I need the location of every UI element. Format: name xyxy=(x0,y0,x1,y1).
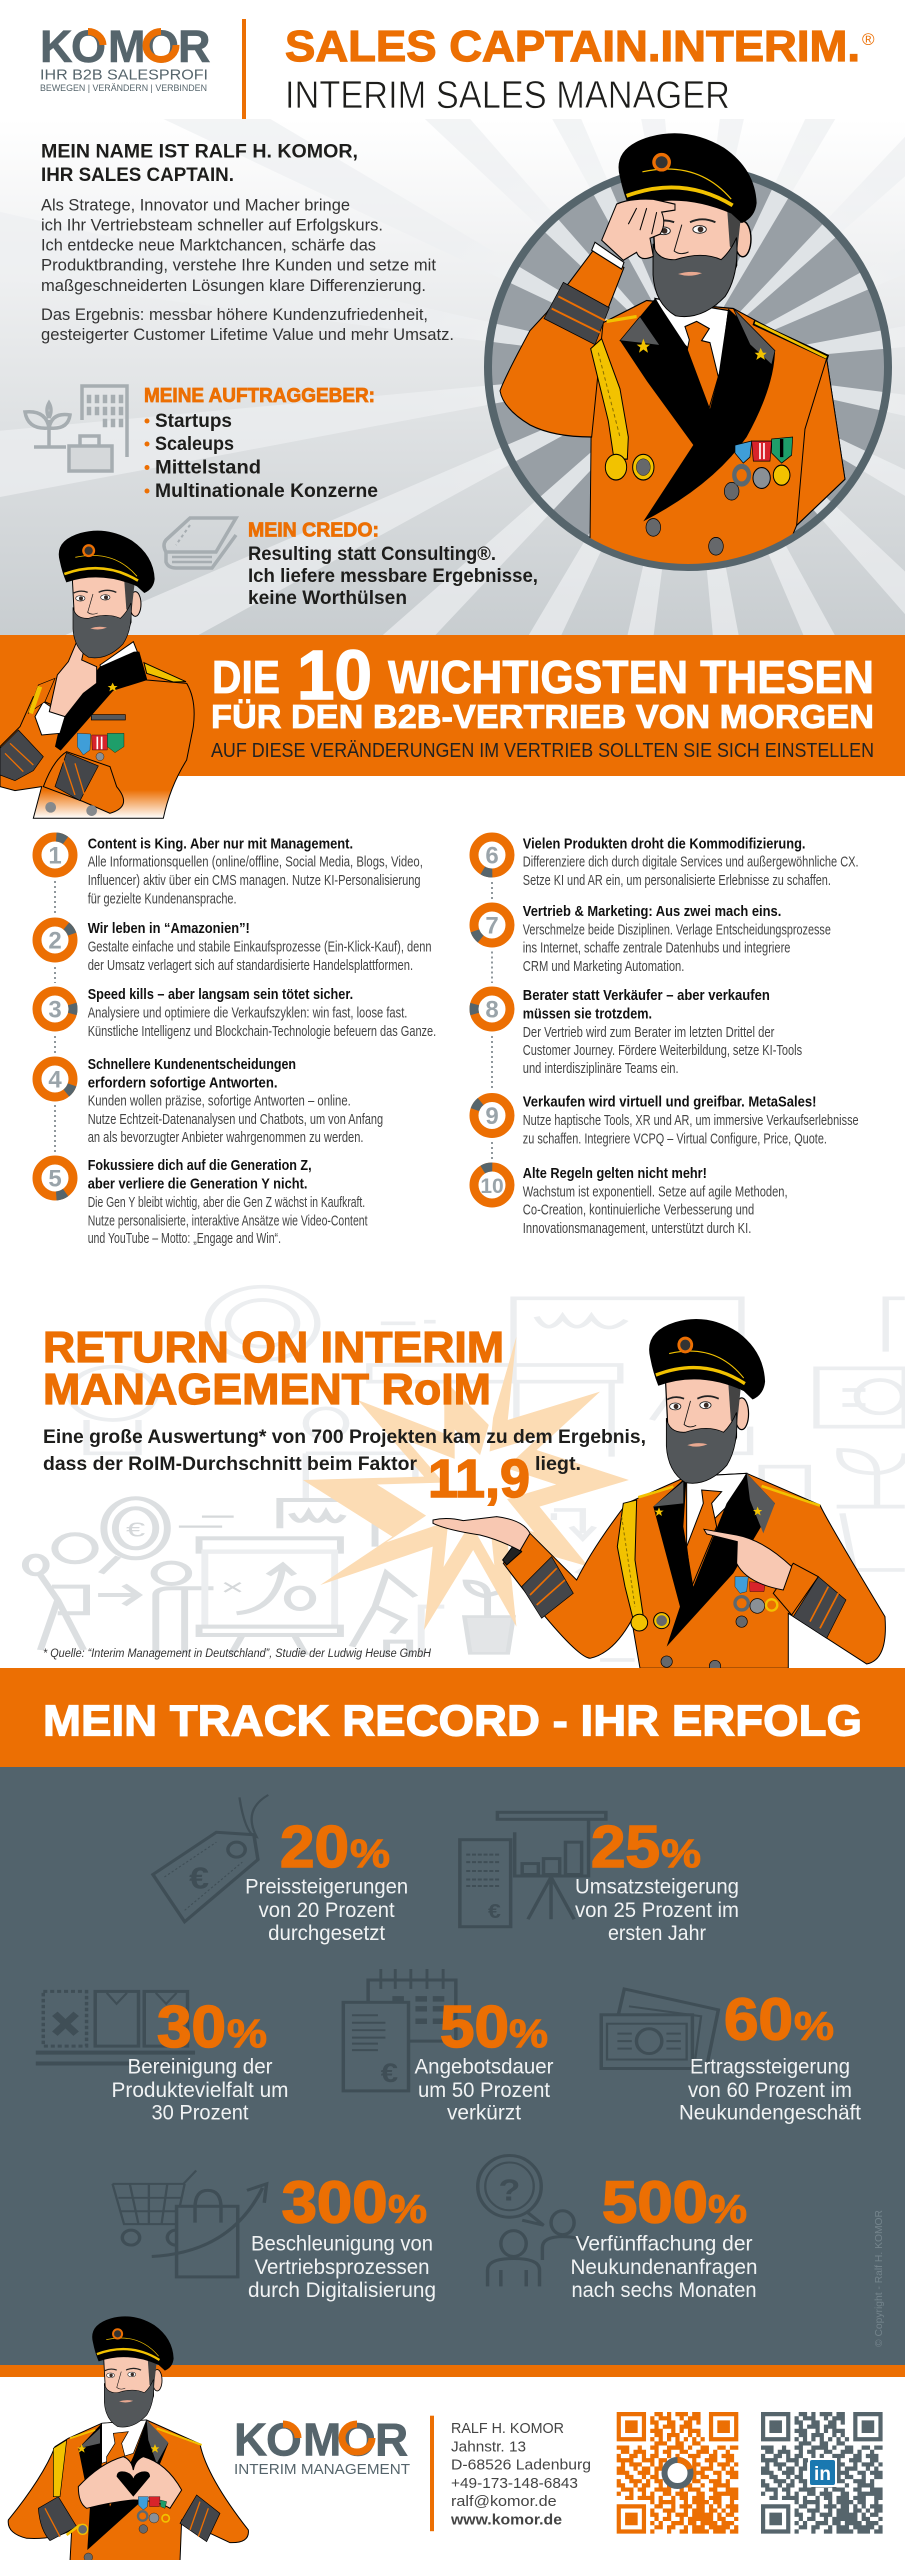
panel: captain medallion circle xyxy=(484,172,892,571)
thesis 8: und interdisziplinäre Teams ein. xyxy=(523,1060,679,1077)
panel: track record banner xyxy=(0,1668,905,1767)
theses banner heading: FÜR DEN B2B-VERTRIEB VON MORGEN xyxy=(211,699,874,736)
illustration: thinking captain xyxy=(0,531,194,818)
stat: 50 percent: 50 xyxy=(440,1994,509,2060)
thesis connector dots xyxy=(55,881,492,1160)
thesis 9 xyxy=(469,1093,859,1147)
RoIM statement: liegt. xyxy=(535,1453,581,1475)
contact block: Jahnstr. 13 xyxy=(451,2440,526,2456)
stat: 30 percent: Produktevielfalt um xyxy=(112,2079,288,2102)
panel: ghost business icons background: × xyxy=(221,1574,244,1600)
stat: 60 percent xyxy=(679,1987,861,2125)
thesis 2 xyxy=(30,915,432,974)
footer divider xyxy=(430,2416,434,2531)
thesis 8: Berater statt Verkäufer – aber verkaufen xyxy=(523,987,770,1004)
stat: 300 percent: Vertriebsprozessen xyxy=(254,2256,430,2279)
footer orange strip xyxy=(0,2365,905,2377)
contact block: D-68526 Ladenburg xyxy=(451,2457,591,2473)
credo text xyxy=(248,520,538,609)
stat: 500 percent xyxy=(570,2170,758,2302)
stat: 300 percent: durch Digitalisierung xyxy=(248,2279,436,2302)
stat: 25 percent: 25 xyxy=(591,1814,660,1880)
thesis 4 xyxy=(32,1056,383,1146)
stat: 20 percent: durchgesetzt xyxy=(268,1922,385,1945)
thesis 10 xyxy=(467,1160,788,1237)
stat: 25 percent: Umsatzsteigerung xyxy=(575,1875,739,1898)
thesis 8 xyxy=(470,987,802,1077)
thesis 2: der Umsatz verlagert sich auf standardisierte Handelsplattformen. xyxy=(88,957,413,974)
illustration: presenting captain xyxy=(433,1319,885,1672)
stat: 300 percent: 300 xyxy=(282,2170,388,2236)
stat: 20 percent: von 20 Prozent xyxy=(259,1899,395,1922)
thesis 4: an als bevorzugter Anbieter wahrgenommen zu werden. xyxy=(88,1129,363,1146)
thesis 5 xyxy=(30,1153,368,1247)
icon: price tag: € xyxy=(189,1862,209,1896)
icon: banknotes xyxy=(601,1989,718,2068)
stat: 500 percent: Neukundenanfragen xyxy=(570,2256,758,2279)
thesis 4: Kunden wollen präzise, sofortige Antworten – online. xyxy=(88,1093,351,1110)
thesis 3: 3 xyxy=(48,996,62,1024)
thesis 8: müssen sie trotzdem. xyxy=(523,1005,652,1022)
contact block: www.komor.de xyxy=(450,2513,562,2529)
intro text block: Als Stratege, Innovator und Macher bringe xyxy=(41,196,350,214)
theses banner heading xyxy=(211,636,874,762)
thesis 7: Vertrieb & Marketing: Aus zwei mach eins. xyxy=(523,903,781,920)
stat: 30 percent: Bereinigung der xyxy=(128,2056,272,2078)
header logo: KOMOR Ihr B2B Salesprofi: IHR B2B SALESPROFI xyxy=(40,66,208,84)
thesis 7: ins Internet, schaffe zentrale Datenhubs und integriere xyxy=(523,940,790,957)
credo text: keine Worthülsen xyxy=(248,588,407,609)
stat: 30 percent: % xyxy=(227,2012,267,2056)
stat: 300 percent: % xyxy=(388,2188,427,2232)
intro text block xyxy=(41,140,454,344)
credo text: MEIN CREDO: xyxy=(248,520,379,542)
icon: receipt and presentation board xyxy=(460,1812,606,1927)
footer logo: KOMOR Interim Management: INTERIM MANAGEMENT xyxy=(234,2461,410,2478)
stat: 30 percent: 30 Prozent xyxy=(152,2102,249,2125)
thesis 8: Customer Journey. Fördere Weiterbildung, setze KI-Tools xyxy=(523,1042,802,1059)
RoIM statement: 11,9 xyxy=(428,1449,530,1509)
stat: 20 percent: % xyxy=(350,1832,390,1876)
stat: 300 percent: Beschleunigung von xyxy=(251,2232,433,2256)
intro text block: gesteigerter Customer Lifetime Value und mehr Umsatz. xyxy=(41,326,454,344)
thesis 6 xyxy=(474,835,859,889)
thesis 4: Schnellere Kundenentscheidungen xyxy=(88,1056,296,1073)
stat: 25 percent: % xyxy=(661,1832,701,1876)
RoIM statement: dass der RoIM-Durchschnitt beim Faktor xyxy=(43,1453,417,1475)
thesis 4: Nutze Echtzeit-Datenanalysen und Chatbots, um von Anfang xyxy=(88,1111,383,1128)
illustration: captain with heart hands xyxy=(8,2316,248,2560)
thesis 10: 10 xyxy=(480,1175,504,1198)
stat: 60 percent: Ertragssteigerung xyxy=(690,2056,850,2078)
stat: 300 percent xyxy=(248,2170,436,2302)
thesis 1: Alle Informationsquellen (online/offline, Social Media, Blogs, Video, xyxy=(88,854,423,871)
stat: 50 percent: % xyxy=(509,2012,548,2056)
contact block: RALF H. KOMOR xyxy=(451,2421,564,2437)
QR code: website xyxy=(617,2412,738,2534)
stat: 25 percent: ersten Jahr xyxy=(608,1922,706,1945)
stat: 60 percent: % xyxy=(794,2005,834,2049)
stat: 20 percent: Preissteigerungen xyxy=(245,1875,408,1898)
thesis 4: erfordern sofortige Antworten. xyxy=(88,1074,278,1091)
contact block: ralf@komor.de xyxy=(451,2494,557,2510)
thesis 3: Künstliche Intelligenz und Blockchain-Technologie befeuern das Ganze. xyxy=(88,1023,436,1040)
theses banner heading: 10 xyxy=(297,636,372,714)
icon: calendar and offer document: € xyxy=(381,2059,398,2088)
stat: 20 percent: 20 xyxy=(280,1814,349,1880)
thesis 10: Wachstum ist exponentiell. Setze auf agile Methoden, xyxy=(523,1183,788,1200)
icon: customers with question bubble: ? xyxy=(499,2174,520,2208)
QR code: LinkedIn xyxy=(761,2412,883,2534)
thesis 5: aber verliere die Generation Y nicht. xyxy=(88,1176,308,1193)
thesis 7: 7 xyxy=(485,912,499,940)
RoIM heading: RETURN ON INTERIM xyxy=(43,1324,504,1372)
thesis 10: Co-Creation, kontinuierliche Verbesserung und xyxy=(523,1202,754,1219)
intro text block: Ich entdecke neue Marktchancen, schärfe das xyxy=(41,236,376,254)
clients list: Scaleups xyxy=(155,434,234,455)
icon: receipt and presentation board: € xyxy=(488,1900,501,1922)
QR code: LinkedIn: in xyxy=(814,2464,831,2485)
title: SALES CAPTAIN.INTERIM. xyxy=(285,22,860,71)
footer logo: KOMOR Interim Management: KOMOR xyxy=(234,2414,408,2466)
thesis 2: Wir leben in “Amazonien”! xyxy=(88,920,250,937)
icon: price tag xyxy=(153,1795,268,1922)
thesis 5: und YouTube – Motto: „Engage and Win“. xyxy=(88,1230,281,1247)
intro text block: IHR SALES CAPTAIN. xyxy=(41,164,234,186)
stat: 20 percent xyxy=(245,1814,408,1945)
thesis 3 xyxy=(33,986,436,1040)
header logo: KOMOR Ihr B2B Salesprofi: KOMOR xyxy=(40,21,210,72)
stat: 60 percent: von 60 Prozent im xyxy=(688,2079,852,2102)
thesis 8: 8 xyxy=(485,996,499,1024)
stat: 50 percent xyxy=(414,1994,554,2125)
stat: 500 percent: nach sechs Monaten xyxy=(572,2279,756,2302)
icon: clients building, plant, briefcase xyxy=(25,386,127,471)
thesis 10: Innovationsmanagement, unterstützt durch KI. xyxy=(523,1220,751,1237)
stat: 30 percent xyxy=(112,1994,288,2125)
thesis 3: Speed kills – aber langsam sein tötet sicher. xyxy=(88,986,353,1003)
thesis 5: Fokussiere dich auf die Generation Z, xyxy=(88,1157,312,1174)
starburst xyxy=(303,1337,629,1630)
intro text block: Produktbranding, verstehe Ihre Kunden und setze mit xyxy=(41,256,436,274)
icon: calendar and offer document xyxy=(343,1969,456,2091)
thesis 2: 2 xyxy=(48,928,62,954)
thesis 3: Analysiere und optimiere die Verkaufszyklen: win fast, loose fast. xyxy=(88,1005,407,1022)
panel: ghost business icons background: € xyxy=(126,1518,146,1541)
RoIM heading xyxy=(43,1324,504,1414)
intro text block: ich Ihr Vertriebsteam schneller auf Erfolgskurs. xyxy=(41,216,383,234)
header logo: KOMOR Ihr B2B Salesprofi: BEWEGEN | VERÄNDERN | VERBINDEN xyxy=(40,83,207,93)
thesis 1: 1 xyxy=(48,842,62,870)
illustration: saluting captain xyxy=(500,133,845,578)
header divider xyxy=(242,19,246,119)
clients list: MEINE AUFTRAGGEBER: xyxy=(144,385,375,407)
thesis 7 xyxy=(467,900,831,975)
panel: sunburst background xyxy=(0,119,905,635)
stat: 30 percent: 30 xyxy=(157,1994,226,2060)
stat: 50 percent: um 50 Prozent xyxy=(418,2079,550,2102)
stat: 500 percent: 500 xyxy=(602,2170,708,2236)
RoIM footnote: * Quelle: “Interim Management in Deutschland”, Studie der Ludwig Heuse GmbH xyxy=(43,1648,432,1660)
stat: 25 percent xyxy=(575,1814,739,1945)
thesis 6: 6 xyxy=(485,842,499,870)
thesis 7: CRM und Marketing Automation. xyxy=(523,958,684,975)
thesis 1: Content is King. Aber nur mit Management. xyxy=(88,835,353,852)
thesis 5: Die Gen Y bleibt wichtig, aber die Gen Z wächst in Kaufkraft. xyxy=(88,1194,365,1211)
stat: 60 percent: 60 xyxy=(724,1987,793,2053)
thesis 8: Der Vertrieb wird zum Berater im letzten Drittel der xyxy=(523,1024,774,1041)
panel: ghost business icons background xyxy=(25,1287,905,1660)
thesis 9: 9 xyxy=(485,1103,499,1130)
thesis 5: Nutze personalisierte, interaktive Ansätze wie Video-Content xyxy=(88,1212,368,1229)
panel: ten theses list xyxy=(30,835,859,1247)
stat: 50 percent: Angebotsdauer xyxy=(414,2056,554,2078)
intro text block: maßgeschneiderten Lösungen klare Differenzierung. xyxy=(41,277,426,295)
thesis 9: Verkaufen wird virtuell und greifbar. MetaSales! xyxy=(523,1094,816,1110)
intro text block: MEIN NAME IST RALF H. KOMOR, xyxy=(41,140,358,162)
intro text block: Das Ergebnis: messbar höhere Kundenzufriedenheit, xyxy=(41,306,428,324)
clients list: Mittelstand xyxy=(155,458,261,478)
stat: 50 percent: verkürzt xyxy=(447,2102,521,2125)
thesis 4: 4 xyxy=(48,1066,62,1094)
panel: track record results xyxy=(0,1767,905,2365)
theses banner heading: WICHTIGSTEN THESEN xyxy=(388,651,874,703)
credo text: Ich liefere messbare Ergebnisse, xyxy=(248,566,538,587)
RoIM heading: MANAGEMENT RoIM xyxy=(43,1366,491,1414)
thesis 5: 5 xyxy=(48,1166,62,1192)
icon: cart, bag and growth arrow xyxy=(113,2170,267,2277)
thesis 6: Vielen Produkten droht die Kommodifizierung. xyxy=(523,835,806,852)
stat: 500 percent: Verfünffachung der xyxy=(576,2232,752,2256)
thesis 2: Gestalte einfache und stabile Einkaufsprozesse (Ein-Klick-Kauf), denn xyxy=(88,938,432,956)
track record heading: MEIN TRACK RECORD - IHR ERFOLG xyxy=(43,1696,862,1746)
panel: orange theses banner xyxy=(0,635,905,776)
icon: book xyxy=(164,518,236,568)
thesis 1 xyxy=(36,835,423,907)
title xyxy=(285,22,875,117)
title: ® xyxy=(862,30,875,49)
contact block xyxy=(450,2421,591,2529)
thesis 1: für gezielte Kundenansprache. xyxy=(88,890,237,907)
icon: customers with question bubble xyxy=(478,2156,583,2286)
clients list: Multinationale Konzerne xyxy=(155,481,378,502)
stat: 500 percent: % xyxy=(708,2188,747,2232)
thesis 1: Influencer) aktiv über ein CMS managen. Nutze KI-Personalisierung xyxy=(88,872,421,889)
credo text: Resulting statt Consulting®. xyxy=(248,544,496,565)
clients list: Startups xyxy=(155,411,232,432)
title: INTERIM SALES MANAGER xyxy=(285,74,730,117)
theses banner heading: DIE xyxy=(212,651,280,703)
icon: product boxes xyxy=(36,1991,195,2064)
stat: 25 percent: von 25 Prozent im xyxy=(575,1899,739,1922)
RoIM statement xyxy=(43,1426,646,1509)
copyright note: © Copyright - Ralf H. KOMOR xyxy=(874,2210,885,2347)
stat: 60 percent: Neukundengeschäft xyxy=(679,2102,861,2125)
thesis 10: Alte Regeln gelten nicht mehr! xyxy=(523,1165,707,1182)
clients list xyxy=(144,385,378,502)
RoIM statement: Eine große Auswertung* von 700 Projekten kam zu dem Ergebnis, xyxy=(43,1426,646,1448)
contact block: +49-173-148-6843 xyxy=(451,2476,578,2492)
